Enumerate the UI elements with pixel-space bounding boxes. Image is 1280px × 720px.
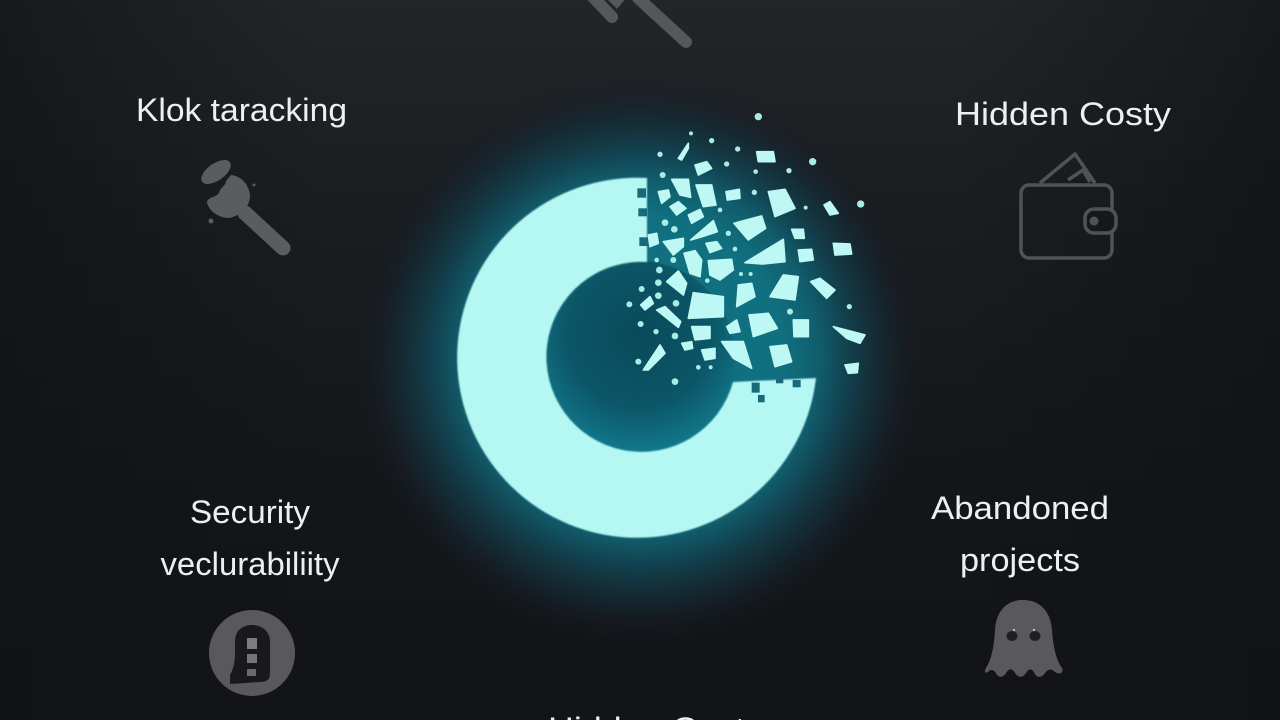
icon: faded hammer at top edge bbox=[592, 0, 686, 42]
shattered fragments bbox=[626, 113, 865, 402]
label: Security vulnerability bbox=[160, 494, 340, 582]
label: Klok taracking: Klok taracking bbox=[136, 92, 347, 128]
label: Abandoned projects: projects bbox=[960, 542, 1080, 578]
icon: ghost bbox=[985, 600, 1063, 677]
ring hole bbox=[543, 261, 735, 453]
label: Hidden Costy: Hidden Costy bbox=[955, 96, 1171, 132]
ring glow bbox=[355, 73, 925, 643]
icon: wallet bbox=[1021, 154, 1116, 258]
icon: broken hammer bbox=[197, 155, 283, 248]
label: Abandoned projects bbox=[931, 490, 1109, 578]
central broken ring bbox=[355, 73, 925, 643]
icon: security keyhole bbox=[209, 610, 295, 696]
label: Abandoned projects: Abandoned bbox=[931, 490, 1109, 526]
label: Security vulnerability: Security bbox=[190, 494, 310, 530]
ring body bbox=[457, 178, 816, 538]
label: Security vulnerability: veclurabiliity bbox=[160, 546, 340, 582]
